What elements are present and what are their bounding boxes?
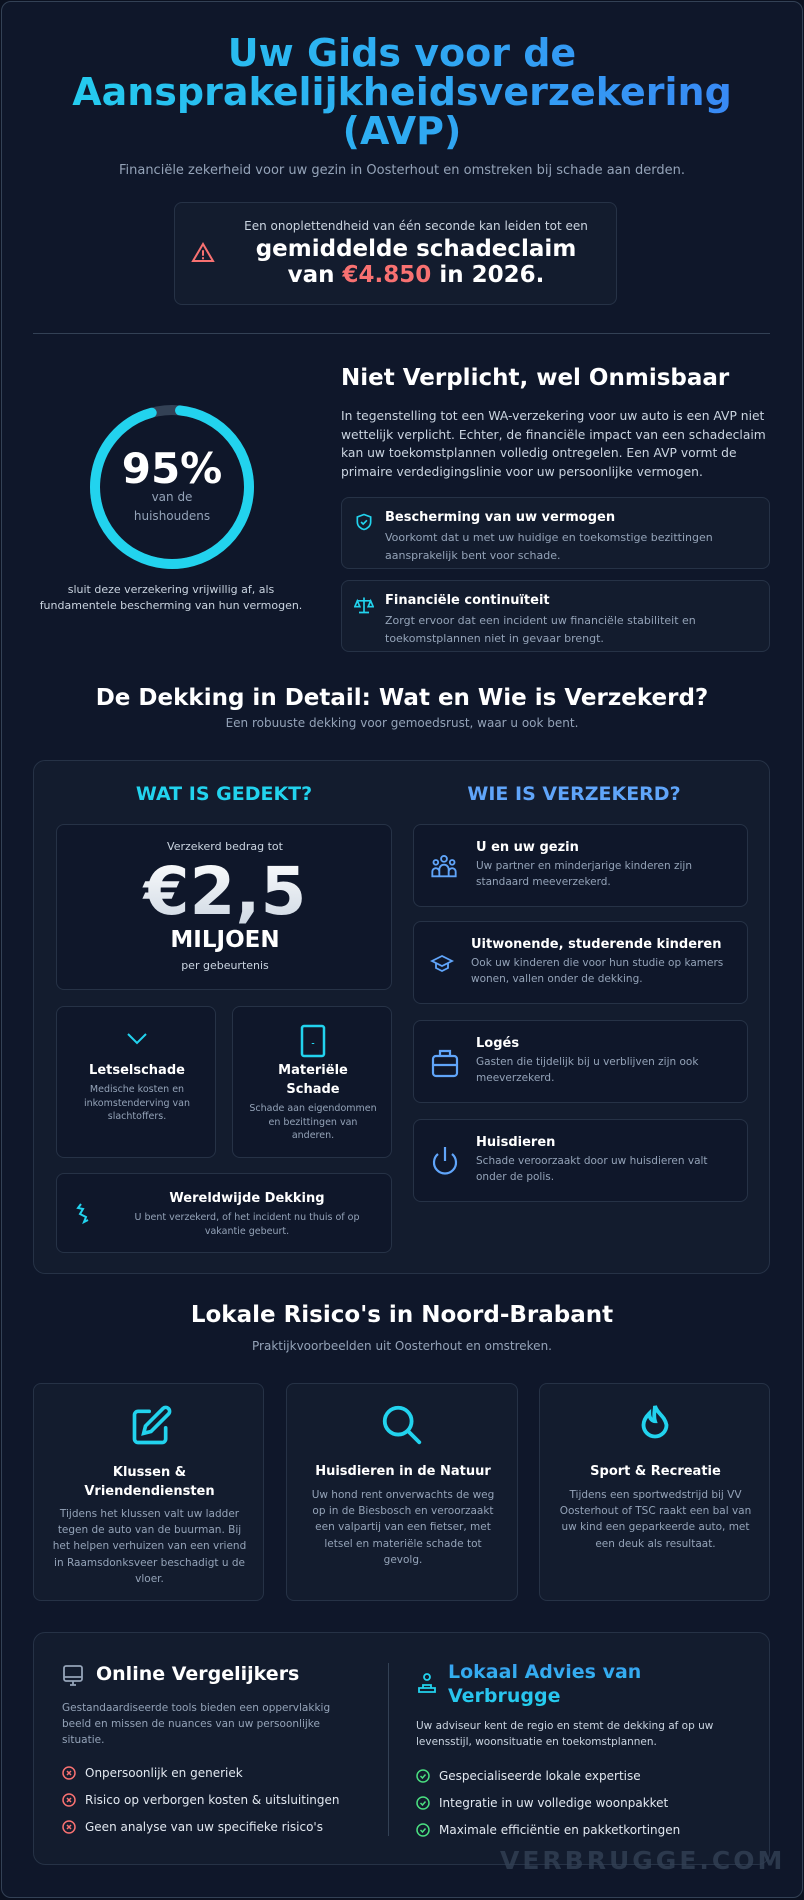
card: klussen: Vriendendiensten (84, 1484, 215, 1499)
box: bescherming: Bescherming van uw vermogen (385, 510, 615, 525)
box: materiele schade: Materiële (278, 1063, 348, 1078)
box: letselschade: Medische kosten en inkomstenderving van slachtoffers. (84, 1084, 190, 1122)
box: huisdieren: Huisdieren (476, 1135, 555, 1150)
box: verzekerd bedrag: Verzekerd bedrag tot (167, 840, 283, 853)
card: huisdieren natuur: Huisdieren in de Natuur (315, 1464, 491, 1479)
box: materiele schade: Schade aan eigendommen en bezittingen van anderen. (249, 1103, 377, 1141)
donut chart: 95% (122, 444, 222, 493)
card: klussen: Tijdens het klussen valt uw ladder tegen de auto van de buurman. Bij het helpen verhuizen van een vriend in Raamsdonksveer beschadigt u de vloer. (53, 1508, 246, 1585)
column: lokaal advies: Maximale efficiëntie en pakketkortingen (439, 1822, 680, 1836)
column: online vergelijkers: Online Vergelijkers (96, 1663, 299, 1685)
box: verzekerd bedrag (56, 824, 392, 990)
card: huisdieren natuur: Uw hond rent onverwachts de weg op in de Biesbosch en veroorzaakt een valpartij van een fietser, met letsel en materiële schade tot gevolg. (312, 1489, 494, 1566)
heading: wie is verzekerd: WIE IS VERZEKERD? (467, 783, 681, 805)
column: lokaal advies (416, 1661, 713, 1837)
column: lokaal advies: Integratie in uw volledige woonpakket (439, 1796, 668, 1810)
box: u en uw gezin (413, 824, 748, 907)
donut chart (90, 405, 254, 569)
column: online vergelijkers (62, 1663, 340, 1834)
heading: wat is gedekt: WAT IS GEDEKT? (136, 783, 312, 805)
box: loges (413, 1020, 748, 1103)
panel: dekking (33, 760, 770, 1274)
paragraph: In tegenstelling tot een WA-verzekering voor uw auto is een AVP niet wettelijk verplicht. Echter, de financiële impact van een schadeclaim kan uw toekomstplannen volledig ontregelen. Een AVP vormt de primaire verdedigingslinie voor uw persoonlijke vermogen. (341, 409, 766, 479)
box: uitwonende kinderen: Ook uw kinderen die voor hun studie op kamers wonen, vallen onder de dekking. (471, 957, 723, 985)
subtitle: Financiële zekerheid voor uw gezin in Oosterhout en omstreken bij schade aan derden. (119, 163, 685, 178)
icon: scales (354, 598, 374, 614)
title (0, 34, 804, 151)
donut chart: huishoudens (134, 509, 210, 523)
box: materiele schade: Schade (286, 1082, 340, 1097)
box: bescherming (341, 497, 770, 569)
callout text: van €4.850 in 2026. (288, 262, 544, 288)
box: uitwonende kinderen: Uitwonende, studerende kinderen (471, 937, 722, 952)
column: online vergelijkers: Geen analyse van uw specifieke risico's (85, 1820, 323, 1834)
box: continuiteit: Financiële continuïteit (385, 593, 550, 608)
box: u en uw gezin: Uw partner en minderjarige kinderen zijn standaard meeverzekerd. (476, 860, 692, 888)
card: huisdieren natuur (286, 1383, 518, 1601)
heading: Niet Verplicht: Niet Verplicht, wel Onmisbaar (341, 365, 729, 391)
watermark: VERBRUGGE.COM (500, 1846, 785, 1875)
box: loges: Gasten die tijdelijk bij u verblijven zijn ook meeverzekerd. (476, 1056, 698, 1084)
column: online vergelijkers: Risico op verborgen kosten & uitsluitingen (85, 1792, 340, 1806)
column: online vergelijkers: Gestandaardiseerde tools bieden een oppervlakkig beeld en missen de nuances van uw persoonlijke situatie. (62, 1702, 330, 1746)
box: letselschade: Letselschade (89, 1063, 185, 1078)
icon: warning triangle (191, 242, 215, 262)
column: lokaal advies: Gespecialiseerde lokale expertise (439, 1768, 641, 1782)
donut caption: fundamentele bescherming van hun vermogen. (40, 599, 302, 612)
box: materiele schade (232, 1006, 392, 1158)
column: lokaal advies: Lokaal Advies van Verbrugge (448, 1661, 641, 1707)
box: bescherming: Voorkomt dat u met uw huidige en toekomstige bezittingen aansprakelijk bent voor schade. (385, 531, 713, 562)
box: continuiteit: Zorgt ervoor dat een incident uw financiële stabiliteit en toekomstplannen niet in gevaar brengt. (385, 614, 696, 645)
callout text: Een onoplettendheid van één seconde kan leiden tot een (244, 219, 588, 233)
title: Uw Gids voor de (228, 31, 576, 75)
box: continuiteit (341, 580, 770, 652)
box: verzekerd bedrag: MILJOEN (170, 927, 280, 953)
donut chart: van de (152, 490, 192, 504)
box: loges: Logés (476, 1036, 519, 1051)
subtitle lokaal: Praktijkvoorbeelden uit Oosterhout en omstreken. (252, 1339, 552, 1353)
box: letselschade (56, 1006, 216, 1158)
box: verzekerd bedrag: per gebeurtenis (181, 959, 269, 972)
card: klussen (33, 1383, 264, 1601)
icon: shield (356, 514, 372, 530)
callout text: gemiddelde schadeclaim (256, 236, 576, 262)
callout: schadeclaim (174, 202, 617, 305)
title: (AVP) (343, 109, 461, 153)
box: uitwonende kinderen (413, 921, 748, 1004)
box: u en uw gezin: U en uw gezin (476, 840, 579, 855)
column: lokaal advies: Uw adviseur kent de regio en stemt de dekking af op uw levensstijl, woonsituatie en toekomstplannen. (416, 1720, 713, 1748)
box: verzekerd bedrag: €2,5 (144, 853, 306, 930)
title: Aansprakelijkheidsverzekering (72, 70, 732, 114)
card: sport: Sport & Recreatie (590, 1464, 721, 1479)
heading: lokale risico's: Lokale Risico's in Noord-Brabant (191, 1302, 613, 1328)
box: huisdieren: Schade veroorzaakt door uw huisdieren valt onder de polis. (476, 1155, 708, 1183)
panel: vergelijking (33, 1632, 770, 1865)
callout text (244, 219, 588, 288)
column: online vergelijkers: Onpersoonlijk en generiek (85, 1766, 243, 1780)
card: sport (539, 1383, 770, 1601)
donut caption: sluit deze verzekering vrijwillig af, als (68, 583, 274, 596)
heading: dekking: De Dekking in Detail: Wat en Wie is Verzekerd? (96, 685, 708, 711)
subtitle dekking: Een robuuste dekking voor gemoedsrust, waar u ook bent. (226, 716, 578, 730)
donut caption (40, 583, 302, 612)
box: wereldwijd: U bent verzekerd, of het incident nu thuis of op vakantie gebeurt. (134, 1212, 360, 1236)
card: sport: Tijdens een sportwedstrijd bij VV Oosterhout of TSC raakt een bal van uw kind een geparkeerde auto, met een deuk als resultaat. (560, 1489, 751, 1550)
box: wereldwijd (56, 1173, 392, 1253)
box: huisdieren (413, 1119, 748, 1202)
card: klussen: Klussen & (113, 1465, 186, 1480)
box: wereldwijd: Wereldwijde Dekking (169, 1191, 325, 1206)
